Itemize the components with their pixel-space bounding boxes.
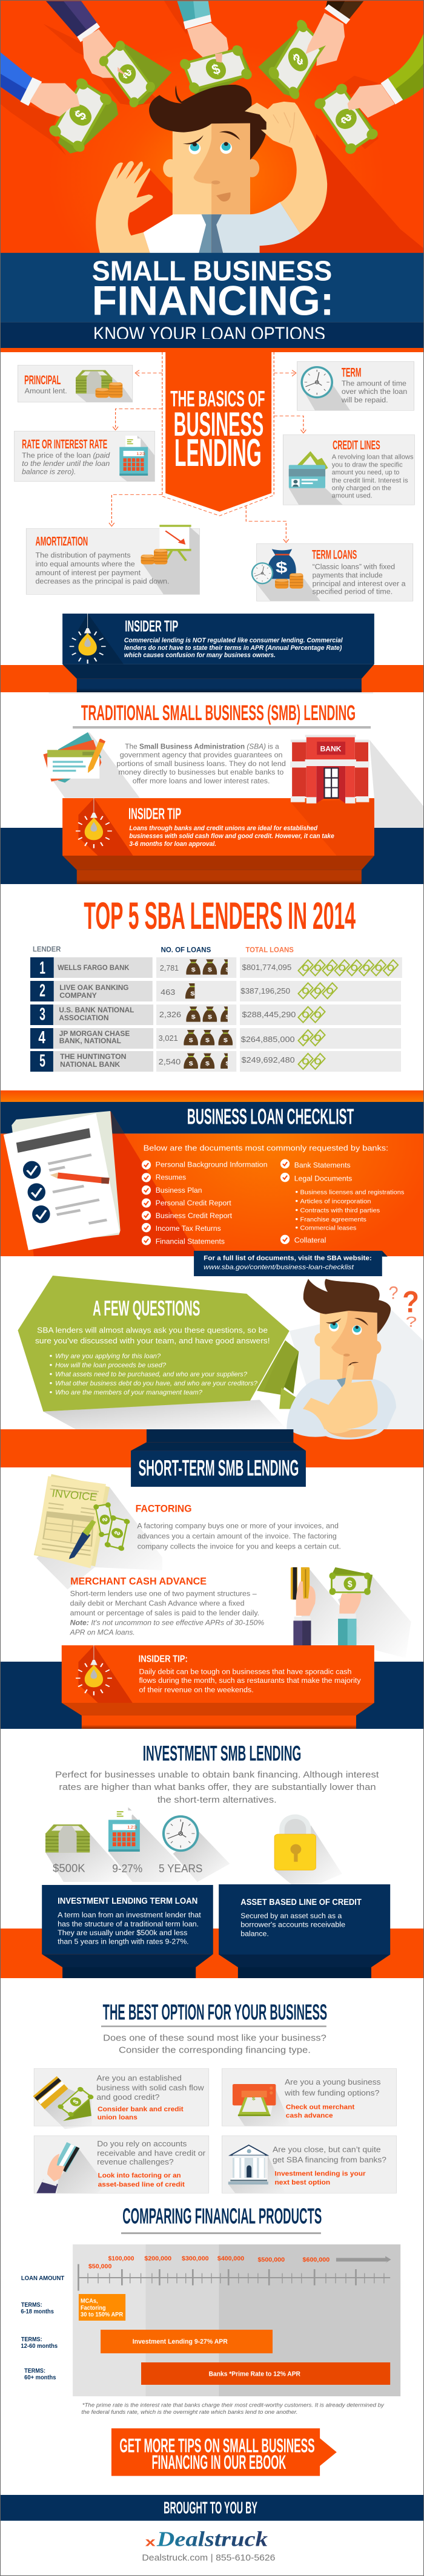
card: rate or interest rate: RATE OR INTEREST RATE	[22, 437, 107, 451]
card: rate or interest rate: balance is zero).	[22, 468, 76, 476]
icon: documents and pencil	[43, 732, 105, 782]
row labels: terms: 12-60 months	[21, 2343, 58, 2350]
panel: basics of business lending: BUSINESS	[174, 405, 263, 443]
icon: hand holding card	[36, 2142, 80, 2193]
checklist: left column: Financial Statements	[156, 1238, 225, 1246]
stat: 9-27% rate	[108, 1807, 142, 1875]
text block: factoring: FACTORING	[136, 1503, 192, 1515]
row 1: Wells Fargo: 2,781	[160, 964, 179, 972]
text: best option intro: Does one of these sound most like your business?	[103, 2033, 326, 2043]
axis labels: loan amounts: $300,000	[182, 2256, 209, 2262]
row 1: Wells Fargo	[30, 957, 402, 978]
checklist: left column: Resumes	[156, 1173, 186, 1182]
card: accounts receivable: asset-based line of credit	[98, 2180, 185, 2188]
card: term loans: payments that include	[313, 571, 383, 580]
speech bubble: a few questions: Who are the members of your managment team?	[55, 1388, 203, 1396]
card: asset based line of credit: Secured by an asset such as a	[240, 1912, 342, 1920]
hand with bill: upper right	[258, 1, 363, 102]
row 1: Wells Fargo: 1	[39, 959, 45, 978]
title: Small Business Financing: KNOW YOUR LOAN OPTIONS	[93, 324, 325, 344]
illustration: thinking man	[287, 1279, 396, 1429]
checklist: right column: Legal Documents	[294, 1175, 352, 1183]
callout: insider tip on bank loans: businesses with solid cash flow and good credit. However, it can take	[129, 832, 334, 840]
bar: MCAs and factoring: MCAs,	[81, 2298, 98, 2304]
icon: hand holding credit card	[291, 1567, 316, 1645]
text: SBA description: money directly to businesses but enable banks to	[119, 769, 283, 776]
title: Small Business Financing: SMALL BUSINESS	[92, 255, 332, 287]
card: accounts receivable	[34, 2135, 209, 2193]
checklist: right column: Collateral	[294, 1237, 326, 1245]
text block: merchant cash advance	[70, 1576, 264, 1637]
bar: banks	[141, 2362, 390, 2385]
text block: merchant cash advance: Short-term lenders use one of two payment structures –	[70, 1590, 257, 1598]
row 3: U.S. Bank: 2,326	[159, 1011, 181, 1019]
callout: insider tip on bank loans: Loans through banks and credit unions are ideal for established	[129, 824, 318, 832]
checklist: left column: Business Plan	[156, 1187, 202, 1195]
icon: cash machine	[233, 2084, 276, 2116]
text block: factoring: advances you a certain amount of the invoice. The factoring	[137, 1532, 337, 1541]
row 4: JP Morgan Chase: 4	[38, 1028, 45, 1047]
card: term: over which the loan	[342, 388, 407, 396]
card: investment lending term loan: than 5 years in length with rates 9-27%.	[58, 1938, 189, 1946]
icon: question marks	[389, 1283, 419, 1330]
icon: bank building	[290, 735, 369, 804]
text block: factoring	[136, 1503, 341, 1551]
card: term loans: specified period of time.	[313, 588, 393, 596]
checklist: right column: Contracts with third parties	[300, 1207, 380, 1214]
checklist: right column	[280, 1159, 404, 1245]
axis labels: loan amounts: $50,000	[88, 2264, 111, 2270]
card: credit lines: only charged on the	[332, 484, 391, 492]
text block: merchant cash advance: daily debit or Merchant Cash Advance where a fixed	[70, 1599, 245, 1608]
callout: full list of documents	[194, 1251, 388, 1276]
text: investment intro: rates are higher than what banks offer, they are substantially lower than	[59, 1781, 376, 1792]
card: young business: with few funding options?	[284, 2089, 379, 2097]
callout: full list of documents: For a full list of documents, visit the SBA website:	[204, 1254, 372, 1262]
icon: credit card	[289, 451, 328, 488]
card: established business: business with solid cash flow	[96, 2083, 204, 2093]
text: best option intro	[103, 2033, 326, 2055]
card: young business	[222, 2068, 396, 2126]
icon: checklist papers and pencil	[4, 1111, 121, 1250]
text: SBA description: portions of small business loans. They do not lend	[116, 760, 286, 768]
row 5: Huntington: 5	[39, 1051, 45, 1070]
stat: 5 years term	[159, 1815, 202, 1875]
man's torso continuation	[289, 1429, 384, 1440]
row 2: Live Oak: LIVE OAK BANKING	[59, 984, 129, 992]
icon: institution building	[228, 2145, 268, 2184]
heading tab: short-term SMB lending	[131, 1429, 306, 1487]
callout: insider tip on commercial lending	[62, 614, 374, 692]
card: investment lending term loan: INVESTMENT LENDING TERM LOAN	[58, 1895, 197, 1906]
footnote: prime rate	[81, 2402, 385, 2416]
panel: top 5 SBA lenders table	[30, 894, 402, 1072]
text block: factoring: A factoring company buys one or more of your invoices, and	[137, 1522, 339, 1530]
card: amortization: The distribution of payments	[35, 552, 131, 560]
callout: insider tip on commercial lending: which causes confusion for many business owners.	[124, 651, 276, 659]
callout: insider tip on daily debit: INSIDER TIP:	[139, 1653, 188, 1664]
icon: light bulb	[76, 798, 112, 848]
text: investment intro	[55, 1769, 379, 1804]
card: close to SBA financing: get SBA financing from banks?	[273, 2155, 386, 2165]
text block: merchant cash advance: Note: It's not uncommon to see effective APRs of 30-150%	[70, 1619, 264, 1627]
checklist: right column: Bank Statements	[294, 1162, 351, 1170]
card: credit lines: you to draw the specific	[332, 460, 403, 468]
checklist: left column: Personal Credit Report	[156, 1199, 231, 1207]
card: established business	[33, 2068, 209, 2129]
panel: short-term SMB lending	[0, 1429, 424, 1729]
speech bubble: a few questions: Why are you applying for this loan?	[55, 1352, 161, 1360]
card: amortization: AMORTIZATION	[35, 534, 88, 549]
card: credit lines	[283, 434, 414, 505]
card: established business: Consider bank and credit	[98, 2105, 184, 2113]
card: amortization: amount of interest per payment	[35, 569, 141, 577]
checklist: right column: Commercial leases	[300, 1224, 356, 1231]
row 5: Huntington: NATIONAL BANK	[60, 1061, 121, 1069]
card: term loans	[251, 543, 413, 601]
icon: cash machine: $	[252, 2096, 256, 2101]
table header: NO. OF LOANS	[161, 946, 211, 954]
text block: merchant cash advance: amount or percentage of sales is paid to the lender daily.	[70, 1610, 259, 1617]
row 2: Live Oak: $387,196,250	[240, 987, 290, 995]
card: term	[297, 361, 414, 410]
text: SBA description	[116, 742, 286, 785]
card: rate or interest rate: The price of the loan (paid	[22, 452, 110, 460]
card: credit lines: amount you need, up to	[332, 468, 399, 476]
panel: basics of business lending: LENDING	[174, 431, 262, 474]
card: accounts receivable: Look into factoring or an	[98, 2171, 181, 2179]
row labels: terms: TERMS:	[21, 2302, 42, 2309]
table header: LENDER	[33, 945, 61, 954]
stat: $500K amount: $500K	[53, 1861, 85, 1875]
row labels: terms: TERMS:	[24, 2368, 45, 2374]
footer band: brought to you by	[0, 2495, 424, 2521]
card: accounts receivable: receivable and have credit or	[97, 2149, 205, 2158]
stat: $500K amount	[45, 1824, 90, 1875]
card: amortization	[26, 525, 199, 594]
card: credit lines: amount used.	[332, 492, 373, 499]
hand with bill: upper left	[46, 1, 171, 110]
card: amortization: decreases as the principal is paid down.	[35, 577, 169, 586]
icon: invoice	[34, 1474, 130, 1568]
table header	[33, 945, 294, 954]
card: young business: cash advance	[286, 2112, 333, 2119]
stat: 5 years term: 5 YEARS	[159, 1862, 202, 1875]
icon: light bulb	[70, 614, 106, 664]
row 3: U.S. Bank: 3	[39, 1005, 45, 1024]
card: accounts receivable: revenue challenges?	[97, 2158, 174, 2166]
ruler axis	[78, 2264, 390, 2291]
panel: business loan checklist	[0, 1090, 424, 1256]
card: close to SBA financing: Investment lending is your	[275, 2170, 366, 2177]
icon: hand holding cash	[330, 1567, 373, 1645]
card: asset based line of credit: balance.	[240, 1930, 269, 1938]
row 1: Wells Fargo: $801,774,095	[242, 963, 291, 972]
panel: investment SMB lending	[0, 1741, 424, 1978]
speech bubble: a few questions: What other business debt do you have, and who are your creditors?	[55, 1379, 258, 1387]
hand with bill: far right	[313, 33, 424, 156]
card: young business: Check out merchant	[286, 2103, 355, 2111]
icon: padlock	[274, 1814, 316, 1870]
icon: declining chart and coins	[141, 525, 191, 565]
bar: investment lending: Investment Lending 9-27% APR	[133, 2338, 228, 2345]
checklist: left column: Business Credit Report	[156, 1212, 232, 1220]
card: asset based line of credit: ASSET BASED LINE OF CREDIT	[240, 1896, 362, 1907]
callout: insider tip on bank loans: INSIDER TIP	[128, 805, 181, 822]
card: young business: Are you a young business	[285, 2078, 381, 2086]
icon: money bag, clock and coins: $	[276, 559, 287, 577]
row 4: JP Morgan Chase: JP MORGAN CHASE	[59, 1030, 130, 1038]
callout: insider tip on bank loans: 3-6 months for loan approval.	[129, 840, 216, 848]
dashed connector arrows	[109, 352, 306, 543]
text: SBA description: offer more loans and lower interest rates.	[133, 777, 270, 785]
row 3: U.S. Bank: $288,445,290	[242, 1011, 296, 1019]
contact line: Dealstruck.com | 855-610-5626	[142, 2552, 275, 2563]
row 5: Huntington: THE HUNTINGTON	[60, 1053, 126, 1061]
bar: investment lending	[101, 2330, 273, 2353]
logo: Dealstruck: Dealstruck	[156, 2527, 268, 2551]
card: established business: and good credit?	[96, 2093, 159, 2102]
card: established business: Are you an established	[96, 2074, 182, 2083]
row labels: terms: 6-18 months	[21, 2309, 54, 2315]
card: investment lending term loan	[42, 1885, 213, 1978]
card: term: will be repaid.	[341, 396, 388, 404]
title: Small Business Financing: FINANCING:	[92, 277, 334, 324]
icon: question marks: ?	[406, 1314, 417, 1330]
speech bubble: a few questions	[18, 1276, 314, 1412]
row 5: Huntington: $249,692,480	[242, 1056, 295, 1064]
icon: money bag, clock and coins	[251, 549, 303, 589]
footnote: prime rate: the federal funds rate, which is the overnight rate which banks lend to one another.	[81, 2409, 298, 2416]
icon: money stack and coins	[76, 370, 122, 398]
card: asset based line of credit: borrower's accounts receivable	[240, 1921, 345, 1929]
text: SBA description: The Small Business Administration (SBA) is a	[125, 742, 279, 751]
axis labels: loan amounts: $400,000	[217, 2256, 244, 2262]
checklist: right column: Articles of incorporation	[300, 1198, 371, 1205]
speech bubble: a few questions: A FEW QUESTIONS	[93, 1297, 200, 1320]
row 4: JP Morgan Chase: $264,885,000	[241, 1035, 295, 1044]
card: close to SBA financing: next best option	[275, 2178, 330, 2186]
callout: insider tip on daily debit	[62, 1645, 374, 1729]
callout: insider tip on daily debit: of their revenue on the weekends.	[139, 1686, 254, 1694]
axis labels: loan amounts	[88, 2256, 330, 2270]
icon: credit card and cash	[33, 2076, 94, 2121]
card: term: TERM	[342, 365, 361, 379]
bar: MCAs and factoring: 30 to 150% APR	[81, 2312, 123, 2318]
hero illustration	[0, 0, 424, 344]
card: rate or interest rate: to the lender until the loan	[22, 460, 110, 468]
icon: light bulb	[76, 1645, 112, 1696]
logo: Dealstruck: x	[145, 2535, 156, 2549]
row 5: Huntington: 2,540	[159, 1058, 181, 1066]
panel: traditional SMB lending	[0, 614, 424, 884]
panel: basics of business lending: THE BASICS OF	[170, 387, 265, 411]
icon: calculator	[119, 436, 148, 476]
row labels: terms: 60+ months	[24, 2374, 56, 2381]
icon: invoice: INVOICE	[51, 1487, 98, 1503]
checklist: left column	[142, 1160, 268, 1246]
row 2: Live Oak: COMPANY	[59, 992, 97, 1000]
row 4: JP Morgan Chase: 3,021	[159, 1034, 178, 1043]
bar: MCAs and factoring: Factoring	[81, 2305, 106, 2312]
card: principal: Amount lent.	[25, 387, 67, 395]
panel: a few questions	[18, 1251, 424, 1429]
checklist: right column: Franchise agreements	[300, 1216, 366, 1223]
text block: merchant cash advance: APR on MCA loans.	[70, 1629, 135, 1637]
checklist: left column: Personal Background Information	[156, 1161, 268, 1169]
card: accounts receivable: Do you rely on accounts	[97, 2140, 187, 2148]
card: term loans: “Classic loans” with fixed	[313, 563, 395, 571]
card: investment lending term loan: A term loan from an investment lender that	[58, 1912, 201, 1919]
row 3: U.S. Bank: U.S. BANK NATIONAL	[59, 1006, 134, 1014]
text: investment intro: the short-term alternatives.	[157, 1794, 277, 1804]
row 1: Wells Fargo: WELLS FARGO BANK	[58, 964, 130, 972]
row 3: U.S. Bank: ASSOCIATION	[59, 1014, 108, 1022]
text block: factoring: company collects the invoice for you and keeps a certain cut.	[137, 1542, 341, 1551]
worried businessman	[96, 85, 327, 254]
table header: TOTAL LOANS	[245, 946, 294, 954]
row labels: terms	[21, 2302, 58, 2381]
row 3: U.S. Bank	[30, 1005, 401, 1025]
icon: bank building: BANK	[320, 746, 342, 753]
icon: question marks: ?	[389, 1283, 399, 1303]
callout: full list of documents: www.sba.gov/content/business-loan-checklist	[204, 1263, 354, 1271]
callout: insider tip on commercial lending: INSIDER TIP	[125, 618, 178, 635]
row 4: JP Morgan Chase	[30, 1028, 401, 1049]
row 2: Live Oak: 2	[39, 981, 45, 1000]
icon: clock	[300, 366, 333, 398]
row labels: terms: TERMS:	[21, 2336, 42, 2343]
card: amortization: into equal amounts where the	[35, 560, 135, 568]
bar: banks: Banks *Prime Rate to 12% APR	[209, 2370, 300, 2378]
card: rate or interest rate	[15, 431, 154, 482]
speech bubble: a few questions: How will the loan proceeds be used?	[55, 1361, 167, 1369]
banner: the basics of business lending	[165, 352, 271, 512]
panel: chart bars and footer	[0, 2294, 424, 2563]
row label: loan amount: LOAN AMOUNT	[21, 2275, 64, 2282]
row 2: Live Oak	[30, 981, 401, 1001]
card: asset based line of credit	[219, 1884, 390, 1978]
axis labels: loan amounts: $100,000	[108, 2256, 134, 2262]
speech bubble: a few questions: What assets need to be purchased, and who are your suppliers?	[55, 1370, 248, 1378]
callout: insider tip on bank loans	[62, 798, 374, 884]
checklist: left column: Income Tax Returns	[156, 1225, 221, 1233]
card: term: The amount of time	[342, 379, 406, 388]
chart: financial products comparison	[21, 2244, 400, 2396]
bar: MCAs and factoring	[79, 2294, 125, 2321]
hand with bill: far left	[0, 52, 118, 154]
footer band: brought to you by: BROUGHT TO YOU BY	[164, 2499, 257, 2517]
card: principal: PRINCIPAL	[24, 373, 61, 387]
card: close to SBA financing	[222, 2135, 396, 2193]
row 2: Live Oak: 463	[161, 988, 175, 997]
hand with bill: top center	[177, 1, 253, 99]
axis labels: loan amounts: $600,000	[303, 2257, 330, 2263]
row 5: Huntington	[30, 1051, 401, 1072]
text: best option intro: Consider the corresponding financing type.	[119, 2045, 311, 2055]
title band	[0, 253, 424, 344]
card: close to SBA financing: Are you close, but can’t quite	[273, 2146, 381, 2154]
panel: best option for your business	[33, 2000, 396, 2234]
text block: merchant cash advance: MERCHANT CASH ADVANCE	[70, 1576, 207, 1587]
speech bubble: a few questions: sure you’ve discussed with your team, and have good answers!	[35, 1337, 270, 1345]
card: principal	[18, 365, 133, 402]
callout: insider tip on daily debit: flows during the month, such as restaurants that make the majority	[139, 1677, 361, 1685]
speech bubble: a few questions: SBA lenders will almost always ask you these questions, so be	[37, 1326, 268, 1335]
text: SBA description: government agency that provides guarantees on	[120, 752, 283, 759]
arrow: increasing amount	[336, 2256, 391, 2263]
callout: insider tip on daily debit: Daily debit can be tough on businesses that have sporadic cash	[139, 1668, 351, 1676]
panel: basics of business lending	[0, 339, 424, 601]
card: investment lending term loan: They are usually under $500k and less	[58, 1929, 187, 1937]
title: Small Business Financing	[92, 255, 334, 344]
card: established business: union loans	[98, 2114, 137, 2121]
stat: 9-27% rate: 9-27%	[112, 1862, 142, 1875]
axis labels: loan amounts: $500,000	[257, 2257, 285, 2263]
call to action: ebook	[111, 2428, 337, 2476]
axis labels: loan amounts: $200,000	[144, 2256, 171, 2262]
row 4: JP Morgan Chase: BANK, NATIONAL	[59, 1037, 121, 1045]
card: investment lending term loan: has the structure of a traditional term loan.	[58, 1920, 199, 1929]
